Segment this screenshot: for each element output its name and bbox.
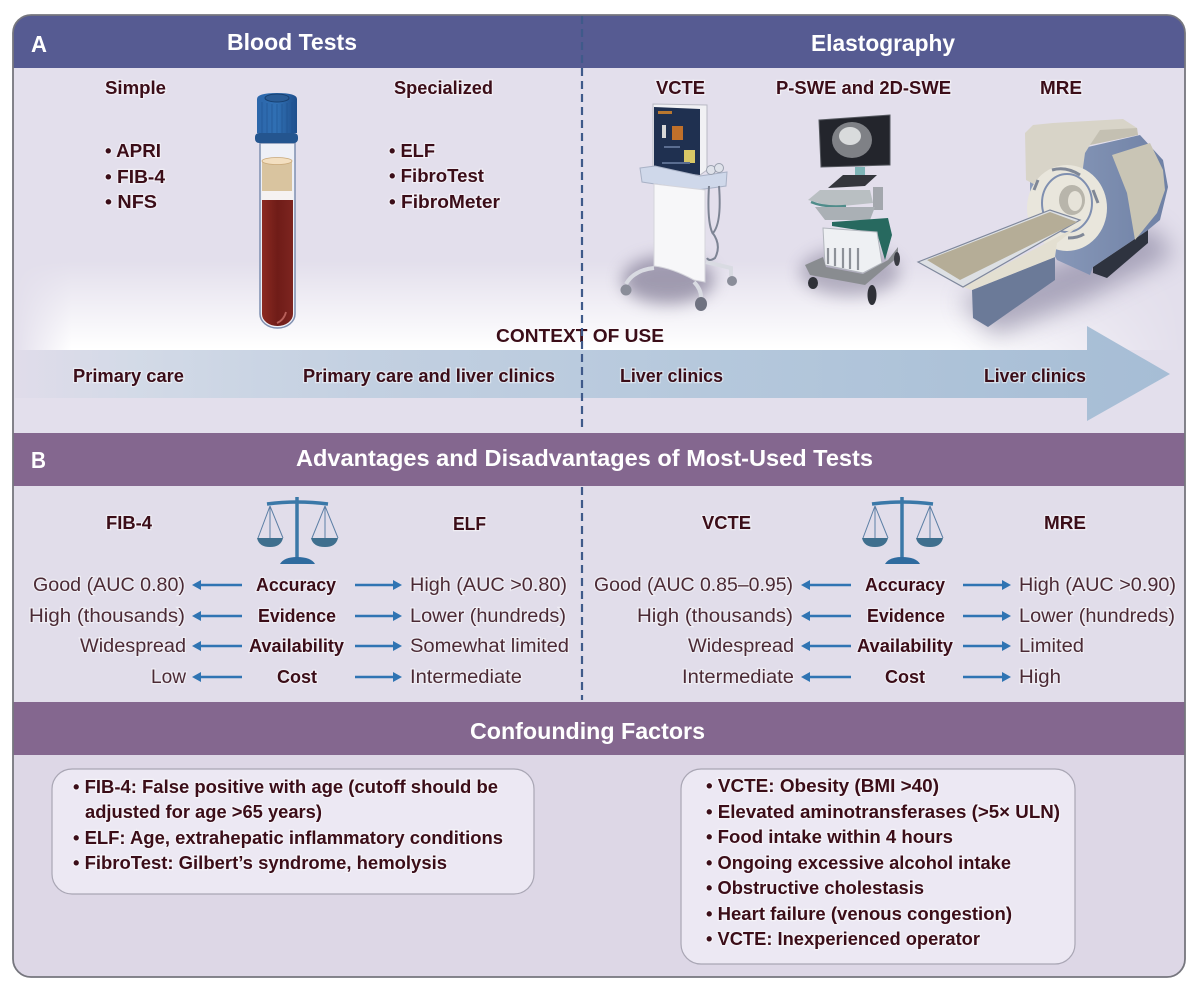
heading: advantages and disadvantages: Advantages and Disadvantages of Most-Used Tests bbox=[296, 445, 873, 471]
row: accuracy: Accuracy bbox=[256, 575, 336, 595]
row: accuracy: High (AUC >0.80) bbox=[410, 575, 567, 596]
label: FIB-4: FIB-4 bbox=[106, 513, 152, 533]
label: MRE: MRE bbox=[1044, 513, 1086, 533]
heading: Elastography: Elastography bbox=[811, 30, 955, 56]
row: evidence: Lower (hundreds) bbox=[1019, 606, 1175, 627]
callout: blood test confounders: • FIB-4: False positive with age (cutoff should be bbox=[73, 777, 498, 797]
label: primary care: Primary care bbox=[73, 366, 184, 386]
row: accuracy: Accuracy bbox=[865, 575, 945, 595]
label: primary care and liver clinics: Primary care and liver clinics bbox=[303, 366, 555, 386]
callout: blood test confounders: • FibroTest: Gilbert’s syndrome, hemolysis bbox=[73, 853, 447, 873]
row: evidence: Lower (hundreds) bbox=[410, 606, 566, 627]
label: liver clinics elastography: Liver clinics bbox=[620, 366, 723, 386]
row: accuracy bbox=[33, 575, 567, 596]
row: cost: Low bbox=[151, 667, 186, 688]
callout: elastography confounders: • Ongoing excessive alcohol intake bbox=[706, 853, 1011, 873]
heading band: confounding factors bbox=[13, 702, 1185, 755]
text block: specialized blood tests bbox=[389, 78, 500, 212]
row: cost: Cost bbox=[277, 667, 317, 687]
row: accuracy: High (AUC >0.90) bbox=[1019, 575, 1176, 596]
callout: blood test confounders: • ELF: Age, extrahepatic inflammatory conditions bbox=[73, 828, 503, 848]
callout: elastography confounders: • VCTE: Inexperienced operator bbox=[706, 929, 980, 949]
text block: specialized blood tests: Specialized bbox=[394, 78, 493, 98]
row: cost: Intermediate bbox=[682, 667, 794, 688]
text block: specialized blood tests: • FibroTest bbox=[389, 166, 484, 186]
row: evidence: Evidence bbox=[258, 606, 336, 626]
row: availability: Availability bbox=[857, 636, 953, 656]
row: cost: Cost bbox=[885, 667, 925, 687]
row: availability: Somewhat limited bbox=[410, 636, 569, 657]
row: cost: Intermediate bbox=[410, 667, 522, 688]
row: availability: Limited bbox=[1019, 636, 1084, 657]
callout: elastography confounders bbox=[681, 769, 1075, 964]
comparison: VCTE versus MRE bbox=[594, 497, 1176, 688]
panel A header band bbox=[13, 15, 1185, 68]
row: evidence: High (thousands) bbox=[637, 606, 793, 627]
row: evidence: Evidence bbox=[867, 606, 945, 626]
icon: balance scale bbox=[257, 497, 338, 564]
callout: blood test confounders bbox=[52, 769, 534, 894]
panel label A: A bbox=[31, 31, 47, 57]
callout: elastography confounders: • Obstructive cholestasis bbox=[706, 878, 924, 898]
text block: specialized blood tests: • ELF bbox=[389, 141, 435, 161]
row: cost: High bbox=[1019, 667, 1061, 688]
comparison: FIB-4 versus ELF bbox=[29, 497, 569, 688]
row: accuracy bbox=[594, 575, 1176, 596]
row: availability bbox=[80, 636, 569, 657]
row: cost bbox=[682, 667, 1061, 688]
heading: Blood Tests: Blood Tests bbox=[227, 29, 357, 55]
text block: simple blood tests: • NFS bbox=[105, 192, 157, 212]
row: evidence bbox=[637, 606, 1175, 627]
row: availability: Widespread bbox=[688, 636, 794, 657]
row: evidence: High (thousands) bbox=[29, 606, 185, 627]
icon: blood collection tube bbox=[255, 93, 298, 328]
label: P-SWE and 2D-SWE: P-SWE and 2D-SWE bbox=[776, 78, 951, 98]
label: ELF: ELF bbox=[453, 514, 486, 534]
panel label B: B bbox=[31, 447, 46, 473]
callout: elastography confounders: • VCTE: Obesity (BMI >40) bbox=[706, 776, 939, 796]
icon: balance scale bbox=[862, 497, 943, 564]
row: availability bbox=[688, 636, 1084, 657]
text block: simple blood tests: • APRI bbox=[105, 141, 161, 161]
label: liver clinics MRE: Liver clinics bbox=[984, 366, 1086, 386]
label: VCTE: VCTE bbox=[702, 513, 751, 533]
text block: simple blood tests bbox=[105, 78, 166, 212]
panel B header band bbox=[13, 433, 1185, 486]
text block: specialized blood tests: • FibroMeter bbox=[389, 192, 500, 212]
callout: elastography confounders: • Food intake within 4 hours bbox=[706, 827, 953, 847]
arrow: context of use continuum bbox=[15, 326, 1170, 421]
label: VCTE: VCTE bbox=[656, 78, 705, 98]
row: availability: Availability bbox=[249, 636, 344, 656]
row: availability: Widespread bbox=[80, 636, 186, 657]
text block: simple blood tests: Simple bbox=[105, 78, 166, 98]
icon: MRI scanner bbox=[918, 119, 1175, 335]
icon: ultrasound machine bbox=[800, 115, 900, 305]
divider: dashed centre line bbox=[581, 16, 583, 700]
callout: elastography confounders: • Heart failure (venous congestion) bbox=[706, 904, 1012, 924]
row: cost bbox=[151, 667, 522, 688]
label: MRE: MRE bbox=[1040, 78, 1082, 98]
label: context of use: CONTEXT OF USE bbox=[496, 326, 664, 346]
icon: VCTE device bbox=[620, 104, 737, 311]
row: evidence bbox=[29, 606, 566, 627]
row: accuracy: Good (AUC 0.80) bbox=[33, 575, 185, 596]
heading band: confounding factors: Confounding Factors bbox=[470, 718, 705, 744]
callout: elastography confounders: • Elevated aminotransferases (>5× ULN) bbox=[706, 802, 1060, 822]
row: accuracy: Good (AUC 0.85–0.95) bbox=[594, 575, 793, 596]
callout: blood test confounders: adjusted for age >65 years) bbox=[85, 802, 322, 822]
text block: simple blood tests: • FIB-4 bbox=[105, 167, 165, 187]
